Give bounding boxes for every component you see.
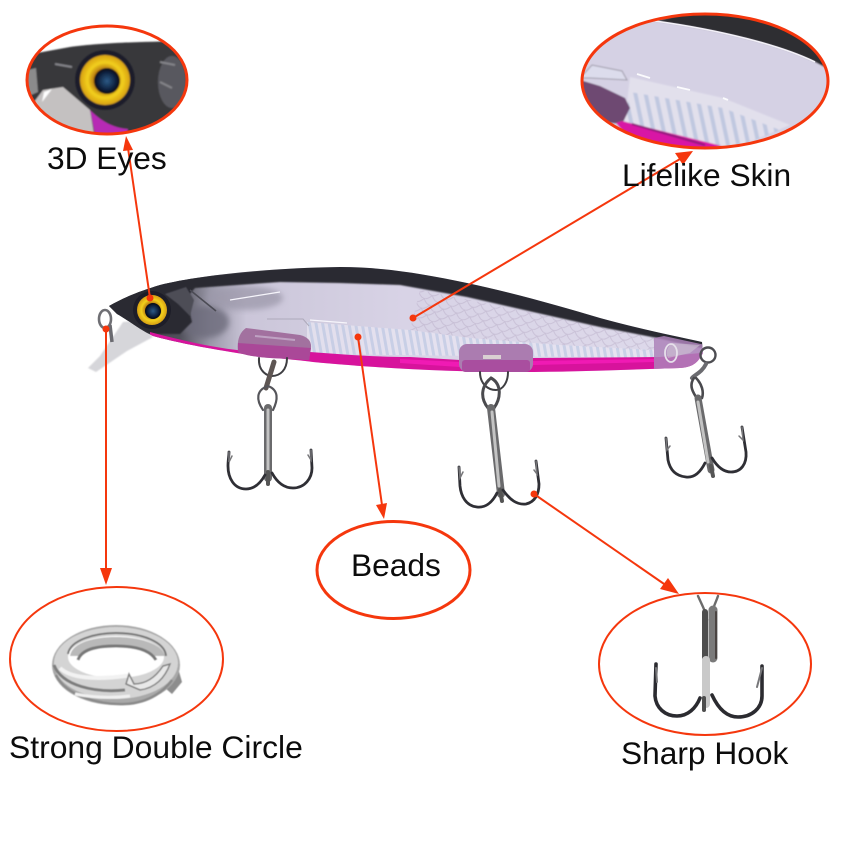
lure eye [133, 291, 171, 329]
arrow: 3D eyes [123, 136, 153, 301]
arrow: beads [355, 334, 387, 519]
label: 3D Eyes: 3D Eyes [47, 140, 167, 176]
hook image [655, 596, 762, 717]
translucent tail [654, 336, 703, 369]
arrow: lifelike skin [410, 151, 693, 321]
inset: split ring [10, 587, 223, 731]
arrow: sharp hook [531, 491, 679, 594]
tail treble hook [666, 348, 746, 477]
arrow: double circle [100, 326, 112, 585]
dark back band [100, 262, 710, 350]
label: Beads: Beads [351, 547, 441, 583]
nose ring [99, 310, 112, 342]
label: Strong Double Circle: Strong Double Circle [9, 729, 303, 765]
label: Sharp Hook: Sharp Hook [621, 735, 788, 771]
front treble hook [228, 358, 312, 489]
belly bead 2 [459, 344, 533, 372]
split ring image [52, 625, 182, 705]
diving bib [88, 321, 153, 372]
ellipse: beads label [317, 522, 470, 618]
belly bead 1 [238, 328, 311, 360]
label: Lifelike Skin: Lifelike Skin [622, 157, 791, 193]
inset: sharp hook [599, 593, 811, 735]
lure illustration [88, 260, 746, 507]
lure body [109, 267, 703, 372]
inset: 3D eye [20, 26, 190, 140]
middle treble hook [459, 372, 539, 507]
pink belly [150, 332, 710, 375]
inset: lifelike skin [580, 10, 830, 152]
